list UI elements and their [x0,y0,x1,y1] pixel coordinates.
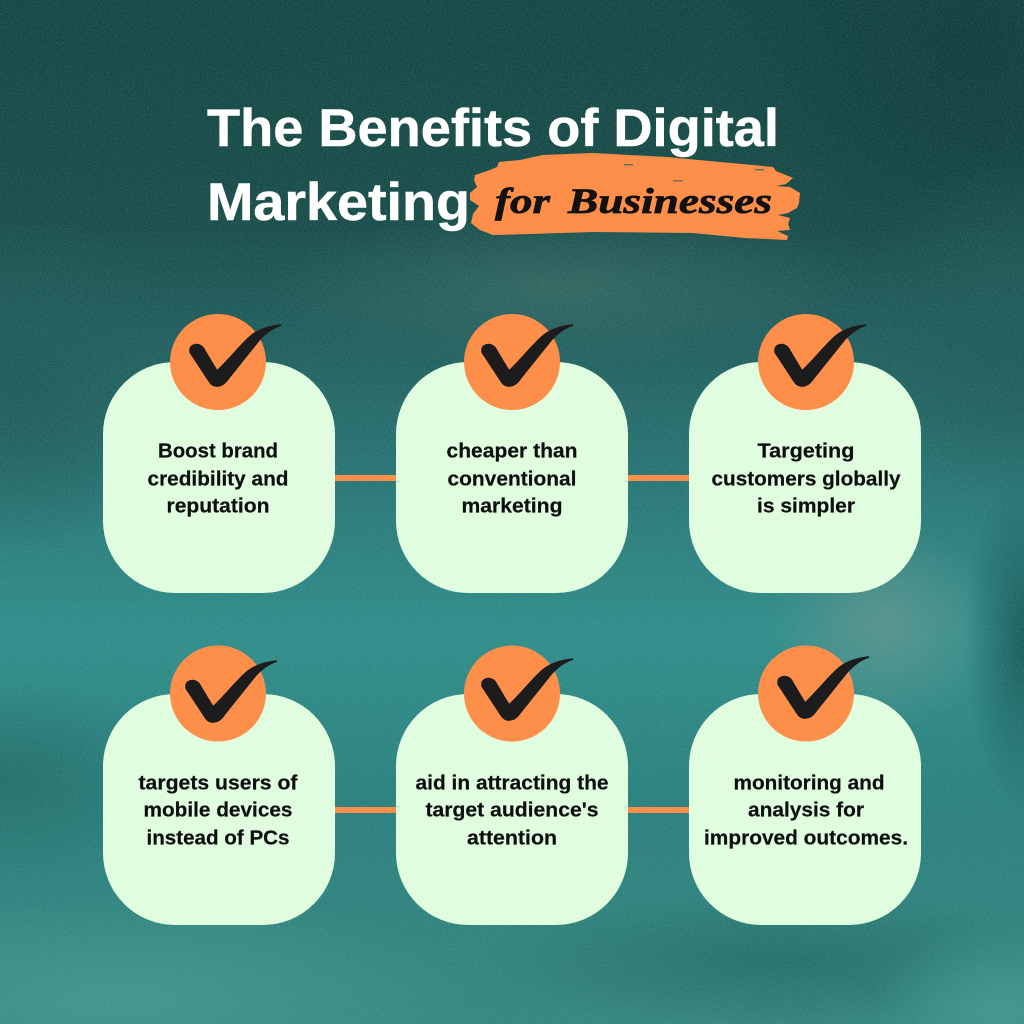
connector lines, row 2 [335,807,689,813]
card: brand credibility [103,314,335,593]
card: global targeting: is simpler [757,496,855,518]
brush stroke highlight with script subtitle: Businesses [567,181,772,221]
card: cheaper: marketing [462,496,562,518]
title [207,99,779,232]
card: mobile users: instead of PCs [146,828,290,850]
icon: check badge [464,314,573,410]
card: brand credibility: Boost brand [158,440,278,462]
card: global targeting [689,314,921,593]
icon: check badge [758,646,869,742]
card: audience attention: target audience's [426,800,598,822]
card: audience attention: attention [467,828,557,850]
title: Marketing [207,173,470,232]
icon: check badge [758,314,866,410]
card: monitoring: analysis for [748,800,864,822]
card: cheaper: cheaper than [446,440,578,462]
icon: check badge [170,314,281,410]
card: audience attention: aid in attracting the [416,772,608,794]
card: cheaper: conventional [448,468,576,490]
card: audience attention [396,646,628,925]
card: brand credibility: credibility and [148,468,288,490]
card: cheaper [396,314,628,593]
icon: check badge [170,646,277,742]
connector lines, row 1 [335,475,689,481]
card: global targeting: customers globally [712,468,901,490]
card: mobile users [103,646,335,925]
card: mobile users: targets users of [138,772,298,794]
card: mobile users: mobile devices [144,800,292,822]
card: brand credibility: reputation [166,496,270,518]
card: global targeting: Targeting [758,440,854,462]
icon: check badge [464,646,573,742]
card: monitoring [689,646,921,925]
title: The Benefits of Digital [207,99,779,158]
brush stroke highlight with script subtitle [470,153,800,240]
card: monitoring: monitoring and [734,772,884,794]
card: monitoring: improved outcomes. [704,828,908,850]
brush stroke highlight with script subtitle: for [495,181,551,221]
